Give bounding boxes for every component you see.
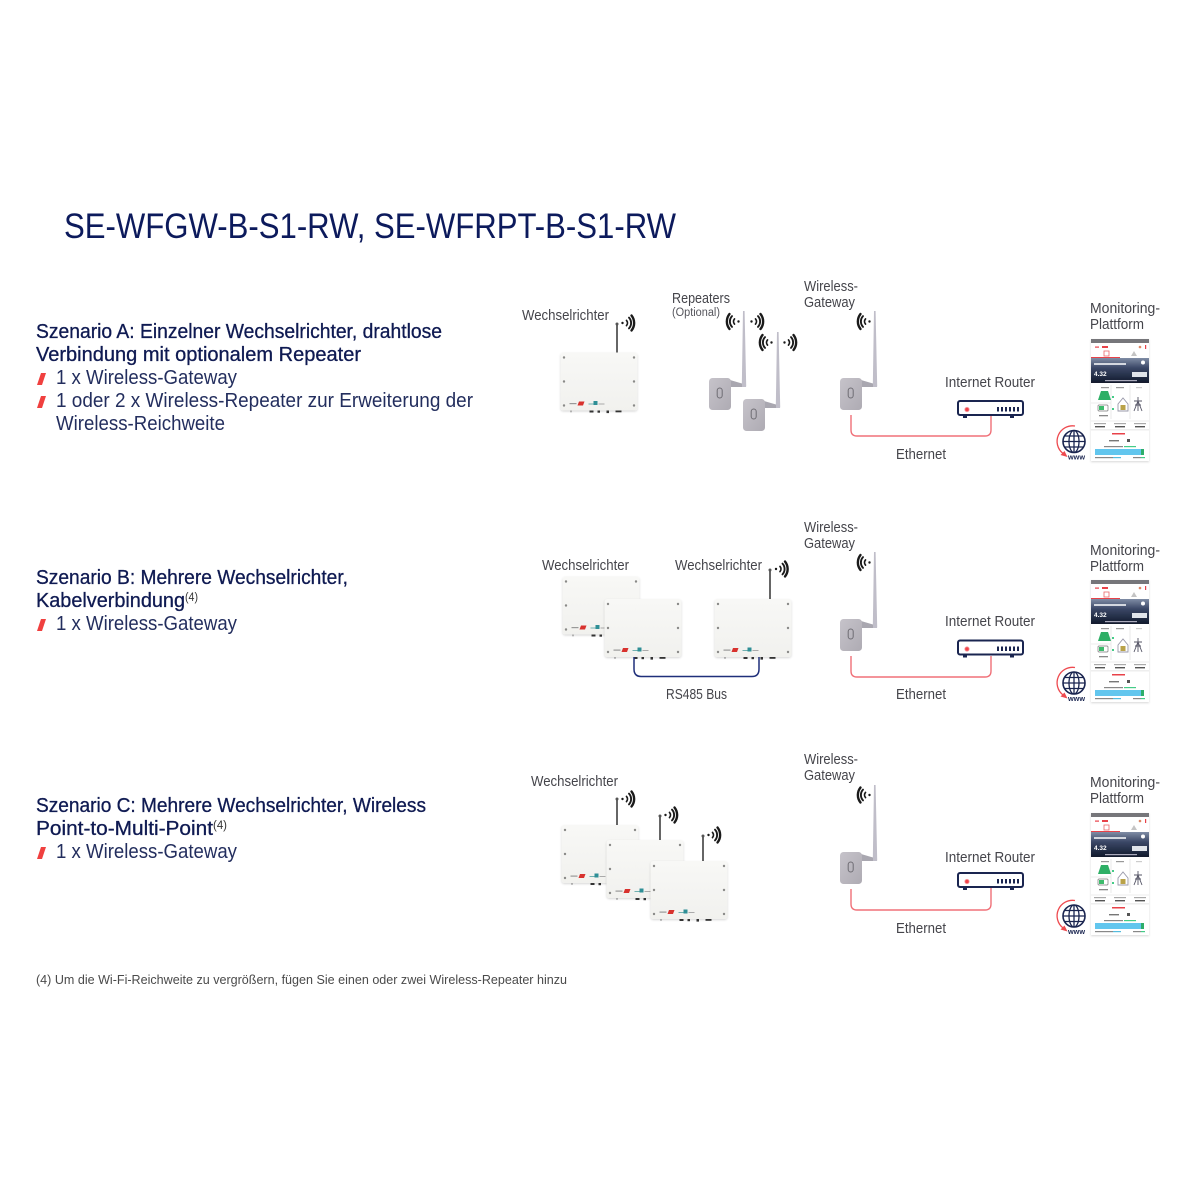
heading: scenario B: Szenario B: Mehrere Wechselrichter, xyxy=(36,567,348,589)
label: internet router: Internet Router xyxy=(945,850,1035,866)
monitoring app screen xyxy=(1091,339,1149,461)
title: SE-WFGW-B-S1-RW, SE-WFRPT-B-S1-RW xyxy=(64,207,676,246)
inverter with antenna xyxy=(714,562,792,660)
label: RS485 bus: RS485 Bus xyxy=(666,687,727,703)
internet router xyxy=(958,640,1023,658)
heading: scenario C: (4) xyxy=(213,820,227,832)
label: ethernet: Ethernet xyxy=(896,447,946,463)
inverter back xyxy=(562,576,640,637)
label: monitoring platform: Monitoring- xyxy=(1090,775,1160,791)
wireless gateway xyxy=(840,785,877,884)
label: internet router: Internet Router xyxy=(945,614,1035,630)
inverter front xyxy=(604,599,682,660)
label: repeaters: Repeaters xyxy=(672,291,730,307)
inverter 2 with antenna xyxy=(606,808,684,901)
heading: scenario A: Verbindung mit optionalem Repeater xyxy=(36,344,361,366)
label: repeaters xyxy=(672,291,730,319)
icon: www globe: www xyxy=(1067,696,1086,703)
ethernet cable xyxy=(851,415,991,436)
label: monitoring platform xyxy=(1090,775,1160,807)
label: inverter left: Wechselrichter xyxy=(542,558,629,574)
diagram: scenario C xyxy=(531,752,1160,937)
label: gateway: Gateway xyxy=(804,536,856,552)
label: gateway: Gateway xyxy=(804,768,856,784)
panel: scenario C description xyxy=(36,795,426,863)
label: monitoring platform: Plattform xyxy=(1090,317,1144,333)
icon: www globe xyxy=(1057,900,1086,936)
monitoring app screen: 4.32 xyxy=(1094,612,1107,619)
internet router xyxy=(958,401,1023,418)
monitoring app screen: 4.32 xyxy=(1094,371,1107,378)
monitoring app screen xyxy=(1091,580,1149,702)
heading: scenario C: Szenario C: Mehrere Wechselrichter, Wireless xyxy=(36,795,426,817)
label: inverter: Wechselrichter xyxy=(531,774,618,790)
label: gateway: Wireless- xyxy=(804,752,858,768)
diagram: scenario A xyxy=(522,279,1160,463)
bullet: gateway: 1 x Wireless-Gateway xyxy=(56,613,237,635)
label: repeaters: (Optional) xyxy=(672,307,720,319)
icon: www globe: www xyxy=(1067,454,1086,462)
icon: www globe xyxy=(1057,426,1086,462)
label: inverter: Wechselrichter xyxy=(522,308,609,324)
ethernet cable xyxy=(851,888,991,910)
label: ethernet: Ethernet xyxy=(896,687,946,703)
heading: scenario B: (4) xyxy=(185,592,198,604)
label: internet router: Internet Router xyxy=(945,375,1035,391)
inverter 1 with antenna xyxy=(562,792,638,886)
label: monitoring platform xyxy=(1090,301,1160,333)
label: monitoring platform: Plattform xyxy=(1090,791,1144,807)
monitoring app screen: 4.32 xyxy=(1094,845,1107,852)
label: monitoring platform: Plattform xyxy=(1090,559,1144,575)
repeater 2 xyxy=(743,332,796,431)
internet router xyxy=(958,873,1023,890)
bullet: repeater: Wireless-Reichweite xyxy=(56,413,225,435)
heading: scenario A xyxy=(36,321,442,366)
bullet: gateway: 1 x Wireless-Gateway xyxy=(56,367,237,389)
heading: scenario C xyxy=(36,795,426,840)
bullet: repeater: 1 oder 2 x Wireless-Repeater zur Erweiterung der xyxy=(56,390,473,412)
bullet: repeater xyxy=(37,390,473,435)
footnote: (4) Um die Wi-Fi-Reichweite zu vergrößern, fügen Sie einen oder zwei Wireless-Repeater hinzu xyxy=(36,972,567,987)
icon: www globe xyxy=(1057,667,1086,703)
monitoring app screen xyxy=(1091,813,1149,935)
heading: scenario B: Kabelverbindung xyxy=(36,590,185,612)
heading: scenario C: Point-to-Multi-Point xyxy=(36,818,213,840)
label: monitoring platform: Monitoring- xyxy=(1090,543,1160,559)
wireless gateway xyxy=(840,552,877,651)
icon: www globe: www xyxy=(1067,929,1086,936)
label: gateway: Wireless- xyxy=(804,520,858,536)
label: gateway: Gateway xyxy=(804,295,856,311)
panel: scenario A description xyxy=(36,321,473,435)
label: monitoring platform: Monitoring- xyxy=(1090,301,1160,317)
diagram: scenario B xyxy=(542,520,1160,703)
label: monitoring platform xyxy=(1090,543,1160,575)
inverter with antenna xyxy=(560,316,638,413)
label: gateway xyxy=(804,520,858,552)
label: gateway: Wireless- xyxy=(804,279,858,295)
bullet: gateway: 1 x Wireless-Gateway xyxy=(56,841,237,863)
ethernet cable xyxy=(851,656,991,677)
inverter 3 with antenna xyxy=(650,828,728,922)
wireless gateway xyxy=(840,311,877,410)
panel: scenario B description xyxy=(36,567,348,635)
label: gateway xyxy=(804,752,858,784)
label: gateway xyxy=(804,279,858,311)
heading: scenario A: Szenario A: Einzelner Wechselrichter, drahtlose xyxy=(36,321,442,343)
label: inverter right: Wechselrichter xyxy=(675,558,762,574)
repeater 1 xyxy=(709,311,763,410)
heading: scenario B xyxy=(36,567,348,612)
label: ethernet: Ethernet xyxy=(896,921,946,937)
RS485 bus cable xyxy=(634,657,759,676)
